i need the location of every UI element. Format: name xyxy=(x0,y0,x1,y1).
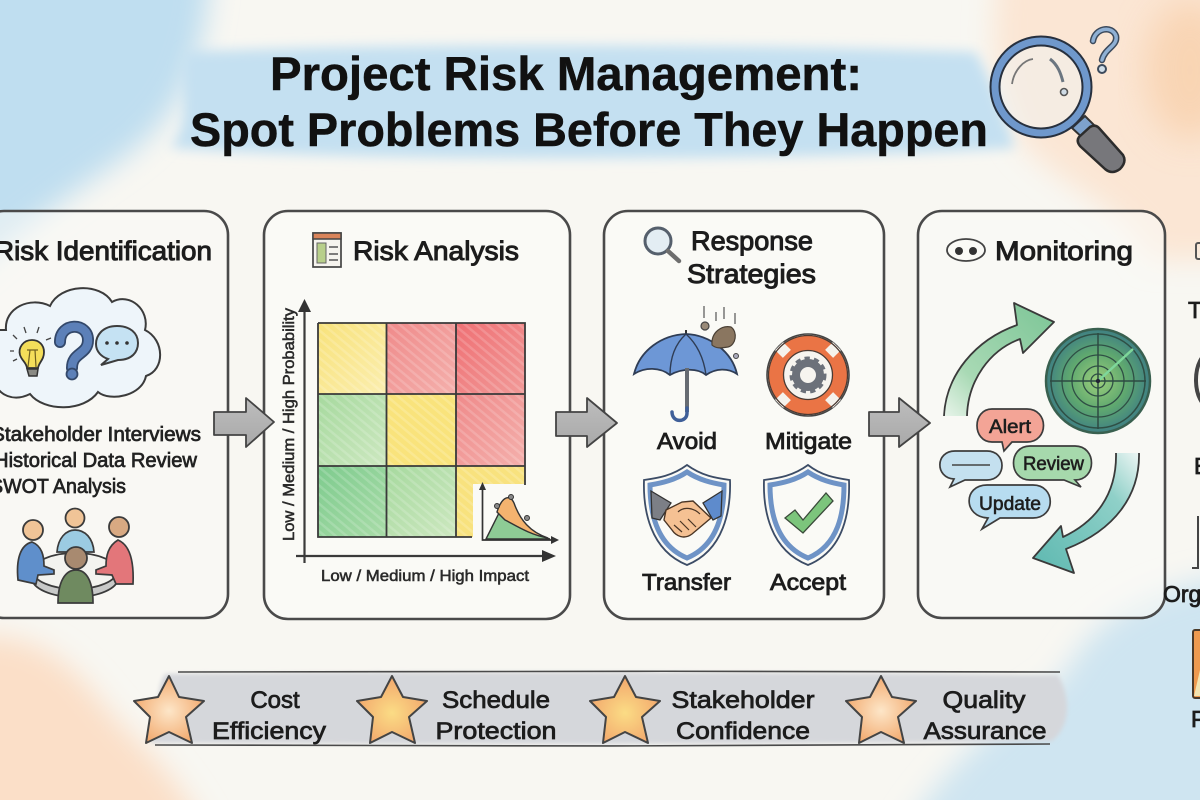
bubble: review xyxy=(1014,446,1092,487)
icon: lifebuoy with gear xyxy=(767,334,849,416)
benefit: cost efficiency: Efficiency xyxy=(212,718,326,745)
heading: response strategies xyxy=(687,226,816,289)
arrow: green cycle xyxy=(944,303,1054,416)
bubble: update: Update xyxy=(979,494,1041,515)
heading: response strategies: Strategies xyxy=(687,259,816,289)
benefit: quality assurance: Assurance xyxy=(924,718,1046,745)
heading: monitoring: Monitoring xyxy=(995,236,1133,266)
risk matrix xyxy=(318,323,533,544)
icon: umbrella with falling rocks xyxy=(634,306,738,420)
y axis label: Low / Medium / High Probability xyxy=(281,308,298,541)
icon: risk register sheet xyxy=(313,233,341,267)
panel: monitoring xyxy=(918,211,1165,618)
panel: risk analysis xyxy=(264,211,570,619)
icon: thought cloud with bulb, question and speech bubble xyxy=(0,288,160,407)
benefit: stakeholder confidence xyxy=(590,676,814,745)
benefit: stakeholder confidence: Confidence xyxy=(676,718,810,745)
icon: magnifying glass with question mark xyxy=(995,29,1124,172)
arrow: response to monitoring xyxy=(869,398,930,447)
benefit: schedule protection: Schedule xyxy=(442,687,550,714)
heading: risk analysis: Risk Analysis xyxy=(353,236,519,266)
icon: team around a table xyxy=(18,508,133,603)
list of identification methods: Historical Data Review xyxy=(0,450,198,472)
title xyxy=(190,47,988,156)
mini distribution chart xyxy=(479,482,559,544)
arrow: identification to analysis xyxy=(214,398,274,447)
title: Project Risk Management: xyxy=(270,47,862,100)
heading: risk identification: Risk Identification xyxy=(0,236,212,266)
benefits band xyxy=(134,671,1067,746)
cropped fifth panel at the right edge xyxy=(1163,243,1200,732)
label: avoid: Avoid xyxy=(657,428,717,454)
bubble: blank note xyxy=(940,451,1002,487)
benefit: schedule protection xyxy=(357,676,556,745)
x axis label: Low / Medium / High Impact xyxy=(321,568,530,585)
bubble: alert xyxy=(977,409,1044,451)
benefit: cost efficiency: Cost xyxy=(250,687,300,714)
panel: risk identification xyxy=(0,211,228,618)
icon: eyes xyxy=(947,239,985,261)
bubble: alert: Alert xyxy=(989,417,1032,438)
benefit: quality assurance xyxy=(846,676,1046,745)
panel: response strategies xyxy=(604,211,884,619)
icon: radar xyxy=(1046,329,1150,433)
benefit: cost efficiency xyxy=(134,676,326,745)
heading: response strategies: Response xyxy=(691,226,813,256)
arrow: analysis to response xyxy=(556,398,617,447)
arrow: teal cycle xyxy=(1033,453,1139,573)
chart axes xyxy=(296,299,556,563)
label: accept: Accept xyxy=(770,569,847,595)
benefit: quality assurance: Quality xyxy=(942,687,1026,714)
label: mitigate: Mitigate xyxy=(765,428,852,454)
benefit: stakeholder confidence: Stakeholder xyxy=(672,687,814,714)
icon: shield with check mark xyxy=(764,465,849,565)
list of identification methods xyxy=(0,424,201,498)
icon: small magnifier xyxy=(645,228,679,261)
icon: shield with handshake xyxy=(644,465,730,565)
bubble: review: Review xyxy=(1023,454,1084,475)
bubble: update xyxy=(969,485,1050,529)
label: transfer: Transfer xyxy=(642,569,731,595)
title: Spot Problems Before They Happen xyxy=(190,103,988,156)
chat bubbles xyxy=(940,409,1092,529)
benefit: schedule protection: Protection xyxy=(436,718,556,745)
